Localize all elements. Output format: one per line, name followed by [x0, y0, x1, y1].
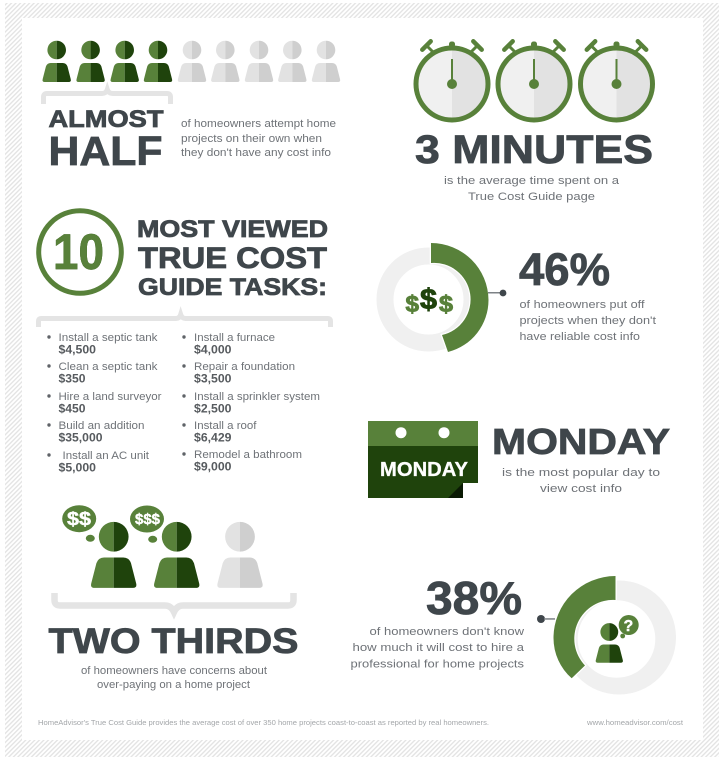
text: 38 percent description: how much it will cost to hire a	[352, 642, 525, 654]
heading: 46 percent: 46%	[519, 244, 610, 295]
icon: dollar signs: $	[406, 291, 419, 317]
heading: almost half: HALF	[48, 128, 162, 174]
text: monday description: view cost info	[540, 483, 622, 495]
text: two thirds description: over-paying on a home project	[97, 679, 250, 691]
footer url: www.homeadvisor.com/cost	[586, 718, 684, 727]
text: almost half description: of homeowners attempt home	[181, 118, 336, 130]
list: tasks column two: $9,000	[194, 462, 232, 474]
text: 38 percent description: of homeowners don't know	[370, 626, 524, 638]
donut chart: 38 percent	[554, 576, 676, 694]
list: tasks column one: Clean a septic tank	[58, 361, 158, 373]
icon row: nine people, four highlighted	[43, 41, 340, 82]
text: 46 percent description: have reliable cost info	[520, 331, 640, 343]
icon: three stopwatches	[416, 41, 652, 120]
text: 38 percent description	[350, 626, 525, 670]
text: two thirds description	[81, 665, 267, 691]
brace	[44, 90, 170, 104]
heading: most viewed true cost guide tasks: TRUE COST	[138, 242, 327, 275]
heading: almost half: ALMOST	[48, 106, 164, 133]
brace	[54, 593, 294, 612]
list: tasks column one: $450	[58, 404, 86, 416]
icon: calendar	[368, 421, 478, 498]
list: tasks column two: Repair a foundation	[194, 361, 295, 373]
heading: most viewed true cost guide tasks	[137, 216, 328, 301]
footer note: HomeAdvisor's True Cost Guide provides the average cost of over 350 home projects coast-to-coast as reported by real homeowners.	[38, 718, 489, 727]
heading: most viewed true cost guide tasks: GUIDE TASKS:	[138, 274, 327, 301]
connector	[537, 615, 555, 623]
list: tasks column two: $2,500	[194, 404, 232, 416]
list: tasks column one	[47, 332, 162, 474]
icon: number ten in circle: 10	[53, 224, 104, 280]
panel: monday	[368, 421, 670, 498]
text: 3 minutes description: True Cost Guide page	[468, 191, 595, 203]
text: almost half description: they don't have any cost info	[181, 147, 331, 159]
list: tasks column two: Install a furnace	[194, 332, 275, 344]
list: tasks column one: $5,000	[58, 462, 96, 474]
panel: two thirds	[48, 505, 298, 691]
icon: dollar signs	[406, 284, 453, 317]
heading: most viewed true cost guide tasks: MOST VIEWED	[137, 216, 328, 243]
list: tasks column one: $35,000	[58, 432, 102, 444]
heading: two thirds: TWO THIRDS	[48, 622, 298, 661]
text: 46 percent description	[520, 299, 656, 343]
text: almost half description	[181, 118, 336, 159]
icon: number ten in circle	[39, 211, 121, 293]
donut chart: 46 percent	[385, 243, 488, 352]
list: tasks column one: Install a septic tank	[58, 332, 158, 344]
text: monday description	[502, 467, 660, 495]
list: tasks column two: Remodel a bathroom	[194, 449, 302, 461]
text: monday description: is the most popular day to	[502, 467, 660, 479]
heading: 3 minutes: 3 MINUTES	[415, 128, 653, 172]
icon: dollar signs: $	[439, 291, 453, 317]
text: two thirds description: of homeowners have concerns about	[81, 665, 267, 677]
list: tasks column two: Install a sprinkler system	[194, 391, 320, 403]
list: tasks column one: Build an addition	[58, 420, 144, 432]
panel: almost half	[43, 41, 340, 174]
text: 46 percent description: of homeowners put off	[520, 299, 646, 311]
list: tasks column one: $350	[58, 374, 86, 386]
icon: dollar signs: $	[420, 284, 437, 316]
text: 3 minutes description	[444, 175, 620, 203]
icon: three people with speech bubbles	[62, 505, 263, 588]
list: tasks column one: $4,500	[58, 344, 96, 356]
icon: three people with speech bubbles: $$	[67, 509, 91, 529]
icon: person with question bubble: ?	[624, 618, 633, 635]
list: tasks column two: Install a roof	[194, 420, 257, 432]
panel: 3 minutes	[415, 41, 653, 203]
list: tasks column one: Hire a land surveyor	[58, 391, 162, 403]
list: tasks column two: $6,429	[194, 432, 232, 444]
icon: calendar: MONDAY	[380, 459, 469, 481]
text: almost half description: projects on their own when	[181, 133, 322, 145]
list: tasks column two: $4,000	[194, 344, 232, 356]
list: tasks column one: Install an AC unit	[62, 450, 149, 462]
heading: almost half	[48, 106, 164, 174]
connector	[488, 290, 506, 296]
panel: 46 percent	[385, 243, 656, 352]
text: 38 percent description: professional for home projects	[350, 658, 525, 670]
heading: monday: MONDAY	[492, 421, 670, 462]
heading: 38 percent: 38%	[426, 572, 522, 624]
text: 3 minutes description: is the average time spent on a	[444, 175, 620, 187]
panel: 38 percent	[350, 572, 676, 694]
list: tasks column two	[182, 332, 320, 474]
brace	[38, 314, 330, 327]
list: tasks column two: $3,500	[194, 374, 232, 386]
text: 46 percent description: projects when they don't	[520, 315, 656, 327]
panel: top ten tasks	[38, 211, 330, 474]
icon: three people with speech bubbles: $$$	[135, 511, 161, 528]
